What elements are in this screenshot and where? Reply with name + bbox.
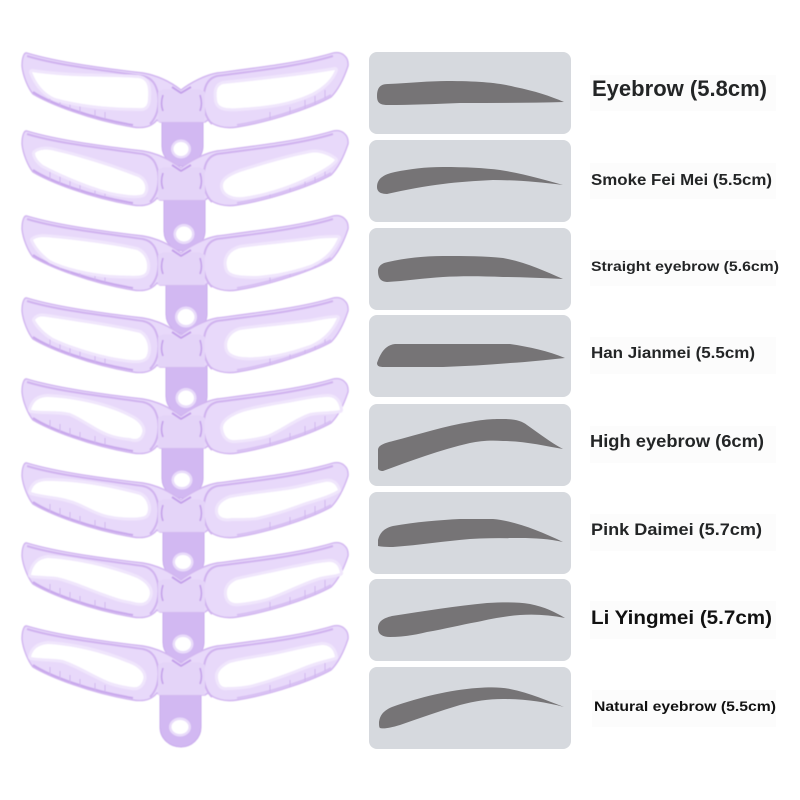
label: pink daimei: Pink Daimei (5.7cm): [591, 520, 762, 539]
label: smoke fei mei: Smoke Fei Mei (5.5cm): [591, 172, 772, 189]
label: han jianmei: Han Jianmei (5.5cm): [591, 345, 755, 362]
stencil 8: [22, 626, 348, 747]
stencil 1: [22, 53, 348, 166]
shape panels: [369, 52, 571, 749]
stencil 2: [22, 131, 348, 251]
panel: han jianmei shape: [369, 315, 571, 397]
stencil 5: [22, 379, 348, 498]
label: smoke fei mei: [590, 163, 776, 199]
label: straight eyebrow: Straight eyebrow (5.6cm): [591, 259, 779, 274]
panel: smoke fei mei shape: [369, 140, 571, 222]
stencil 7: [22, 543, 348, 662]
label: eyebrow: [590, 75, 776, 111]
label: li yingmei: Li Yingmei (5.7cm): [591, 608, 772, 629]
label: eyebrow: Eyebrow (5.8cm): [592, 76, 767, 101]
label: li yingmei: [590, 601, 776, 639]
label: han jianmei: [590, 337, 776, 374]
labels: [590, 75, 779, 727]
stencil set: [22, 53, 348, 747]
stencil 3: [22, 216, 348, 334]
label: pink daimei: [590, 514, 776, 551]
label: high eyebrow: [590, 426, 776, 463]
panel: natural eyebrow shape: [369, 667, 571, 749]
label: natural eyebrow: Natural eyebrow (5.5cm): [594, 699, 776, 714]
label: high eyebrow: High eyebrow (6cm): [590, 431, 764, 451]
panel: straight eyebrow shape: [369, 228, 571, 310]
stencil 4: [22, 298, 348, 416]
panel: li yingmei shape: [369, 579, 571, 661]
label: straight eyebrow: [590, 250, 779, 286]
label: natural eyebrow: [592, 690, 776, 727]
stencil 6: [22, 463, 348, 580]
panel: pink daimei shape: [369, 492, 571, 574]
panel: high eyebrow shape: [369, 404, 571, 486]
panel: eyebrow shape: [369, 52, 571, 134]
